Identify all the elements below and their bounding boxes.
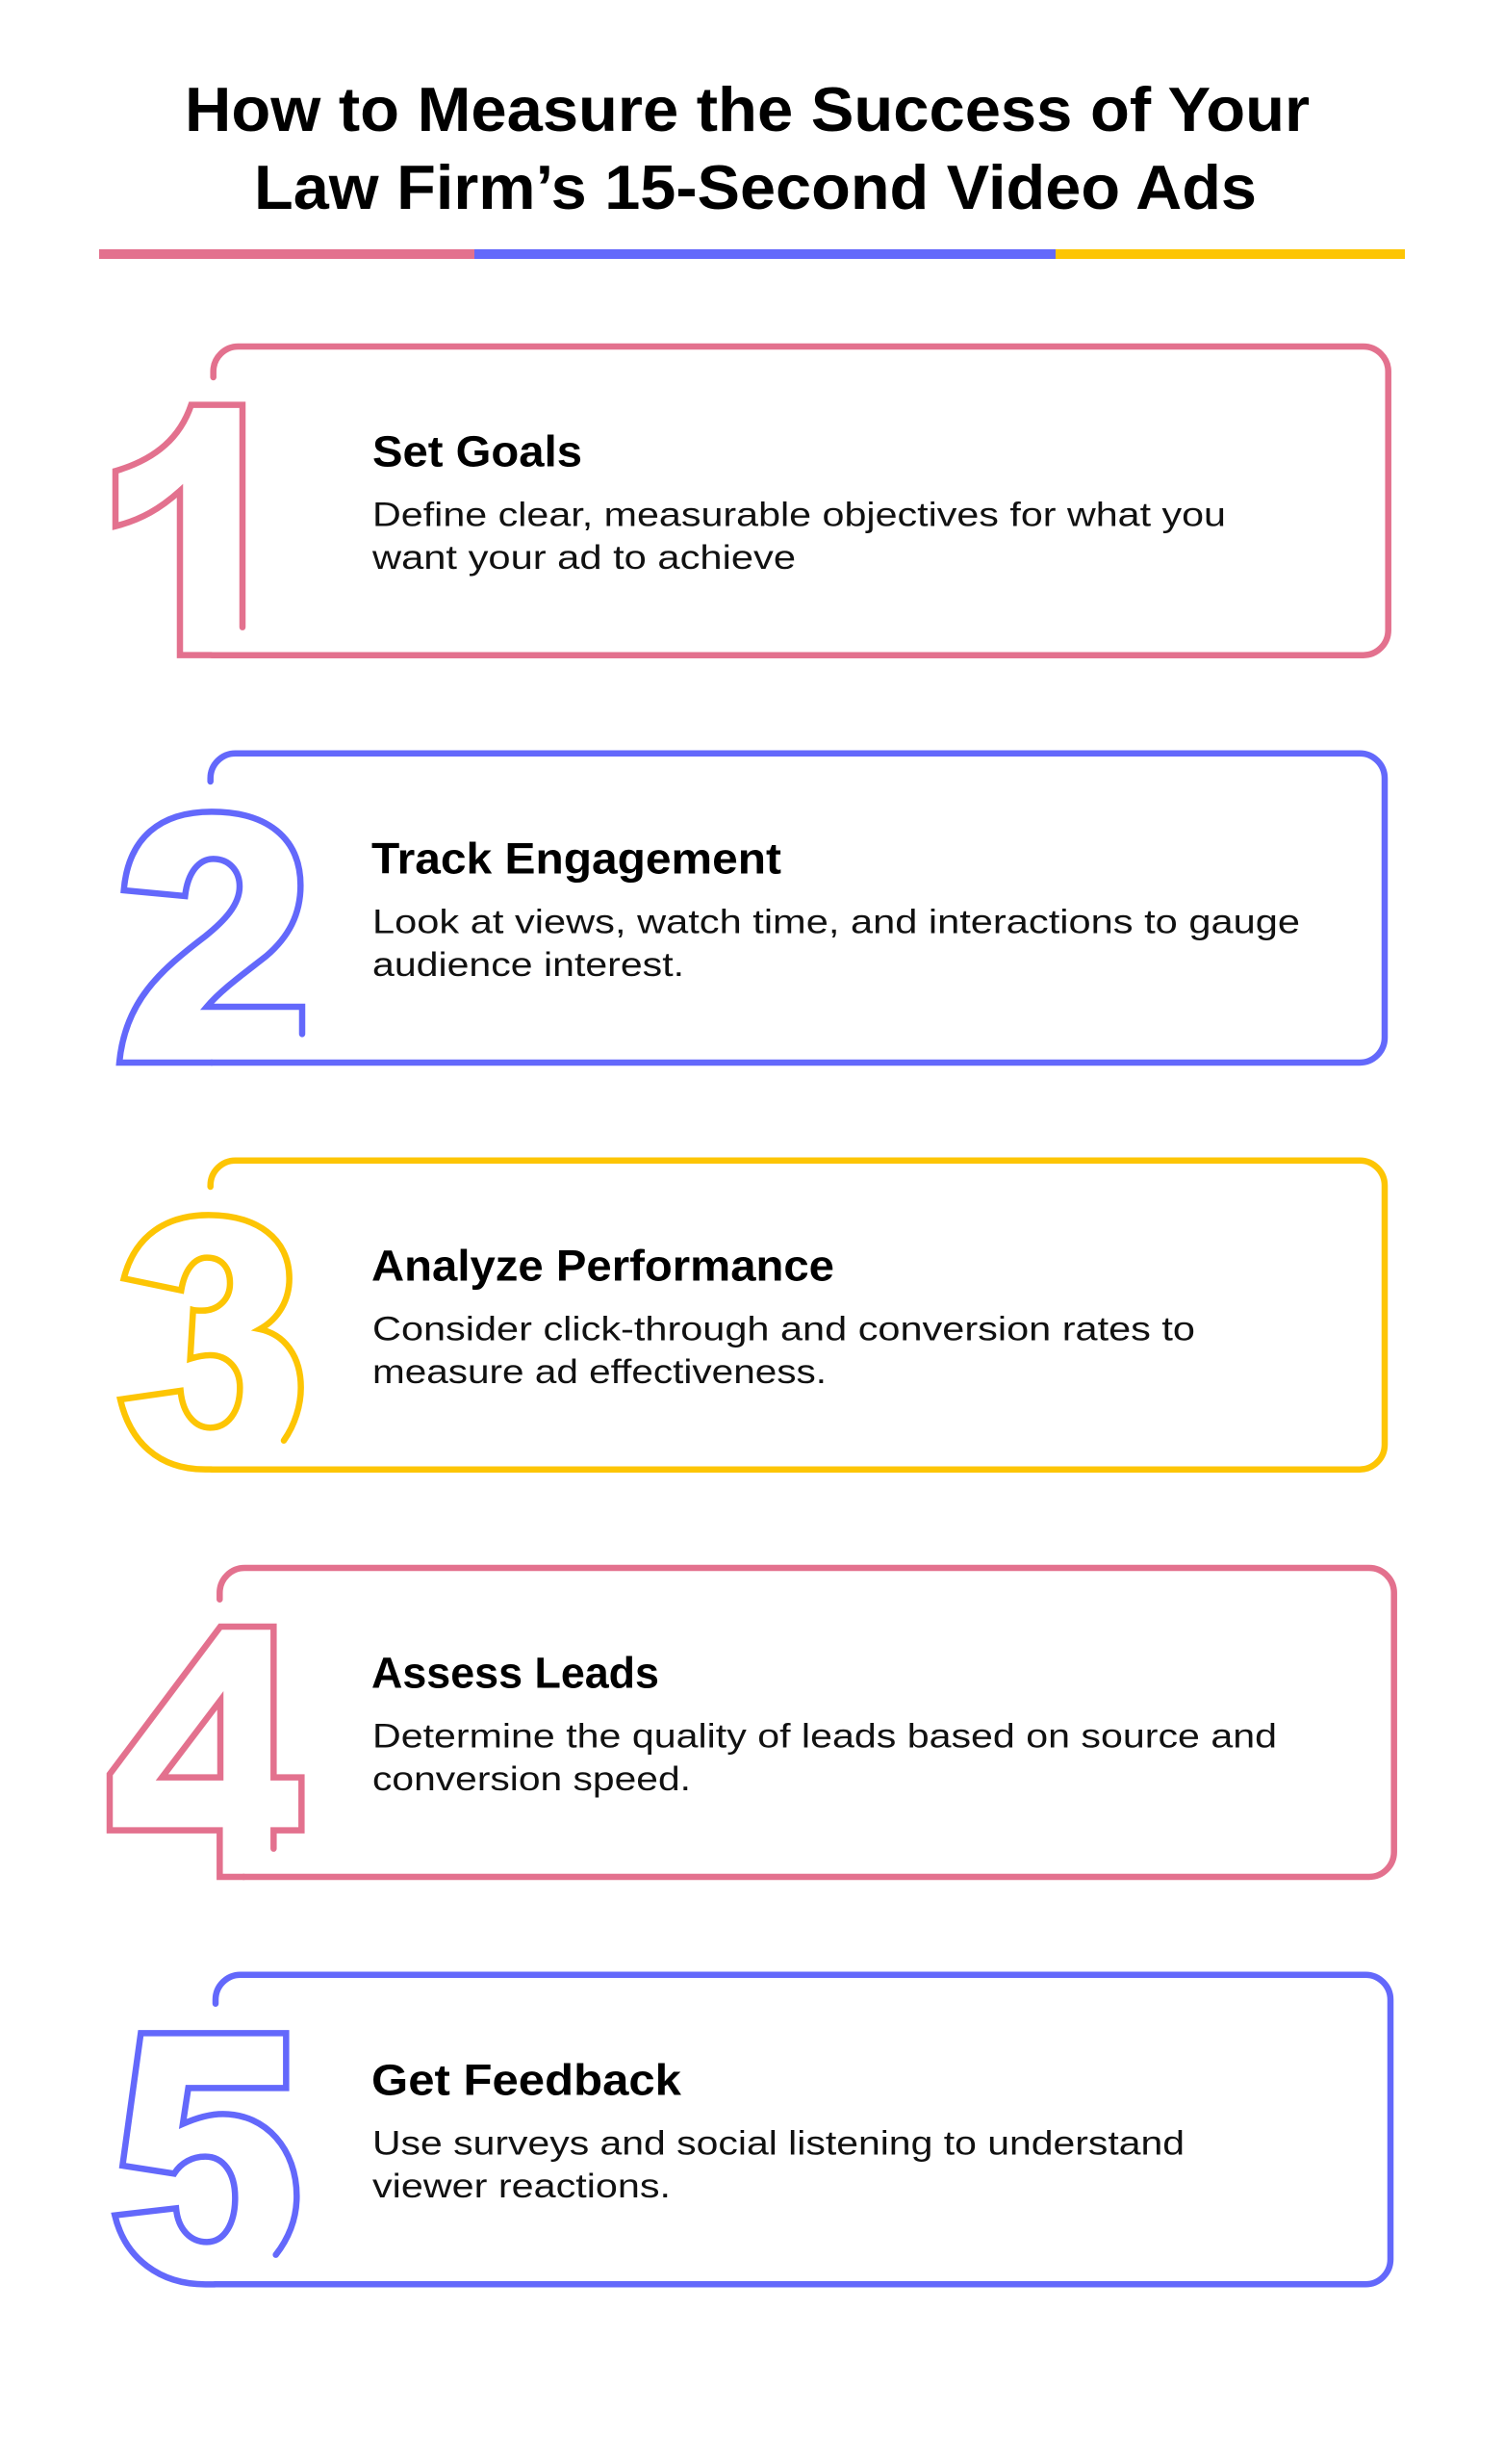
heading: assess leads: Assess Leads (371, 1648, 659, 1698)
card outline 5 (215, 1975, 1390, 2284)
description: get feedback (372, 2125, 1185, 2205)
panel: step 4 assess leads (110, 1568, 1394, 1877)
description: track engagement (372, 903, 1300, 984)
title (185, 74, 1310, 222)
heading: track engagement: Track Engagement (371, 834, 781, 884)
panel: step 1 set goals (115, 346, 1389, 655)
panel: step 5 get feedback (115, 1975, 1390, 2284)
heading: get feedback: Get Feedback (371, 2056, 682, 2104)
description: assess leads: conversion speed. (372, 1760, 691, 1798)
card outline 1 (212, 346, 1389, 655)
title: How to Measure the Success of Your (185, 74, 1310, 144)
description: analyze performance (372, 1311, 1195, 1391)
number 3 outline (120, 1215, 301, 1470)
description: analyze performance: measure ad effectiveness. (372, 1353, 827, 1391)
description: set goals (371, 497, 1226, 577)
number 5 outline (115, 2033, 296, 2284)
description: track engagement: Look at views, watch time, and interactions to gauge (372, 903, 1300, 941)
description: assess leads (372, 1717, 1277, 1798)
description: assess leads: Determine the quality of leads based on source and (372, 1717, 1277, 1756)
description: set goals: want your ad to achieve (371, 539, 796, 577)
card outline 4 (219, 1568, 1394, 1877)
number 4 outline (110, 1627, 301, 1877)
description: analyze performance: Consider click-through and conversion rates to (372, 1311, 1195, 1348)
heading: set goals: Set Goals (372, 427, 582, 475)
description: track engagement: audience interest. (372, 946, 684, 984)
heading: analyze performance: Analyze Performance (371, 1242, 834, 1290)
number 1 outline (115, 405, 242, 655)
tri-colour title underline (99, 249, 1405, 259)
description: get feedback: Use surveys and social listening to understand (372, 2125, 1185, 2162)
number 2 outline (119, 811, 302, 1063)
description: set goals: Define clear, measurable objectives for what you (372, 497, 1226, 533)
card outline 2 (211, 754, 1385, 1063)
description: get feedback: viewer reactions. (372, 2168, 671, 2205)
card outline 3 (211, 1161, 1385, 1470)
panel: step 2 track engagement (119, 754, 1385, 1063)
panel: step 3 analyze performance (120, 1161, 1385, 1470)
title: Law Firm’s 15-Second Video Ads (254, 152, 1257, 222)
